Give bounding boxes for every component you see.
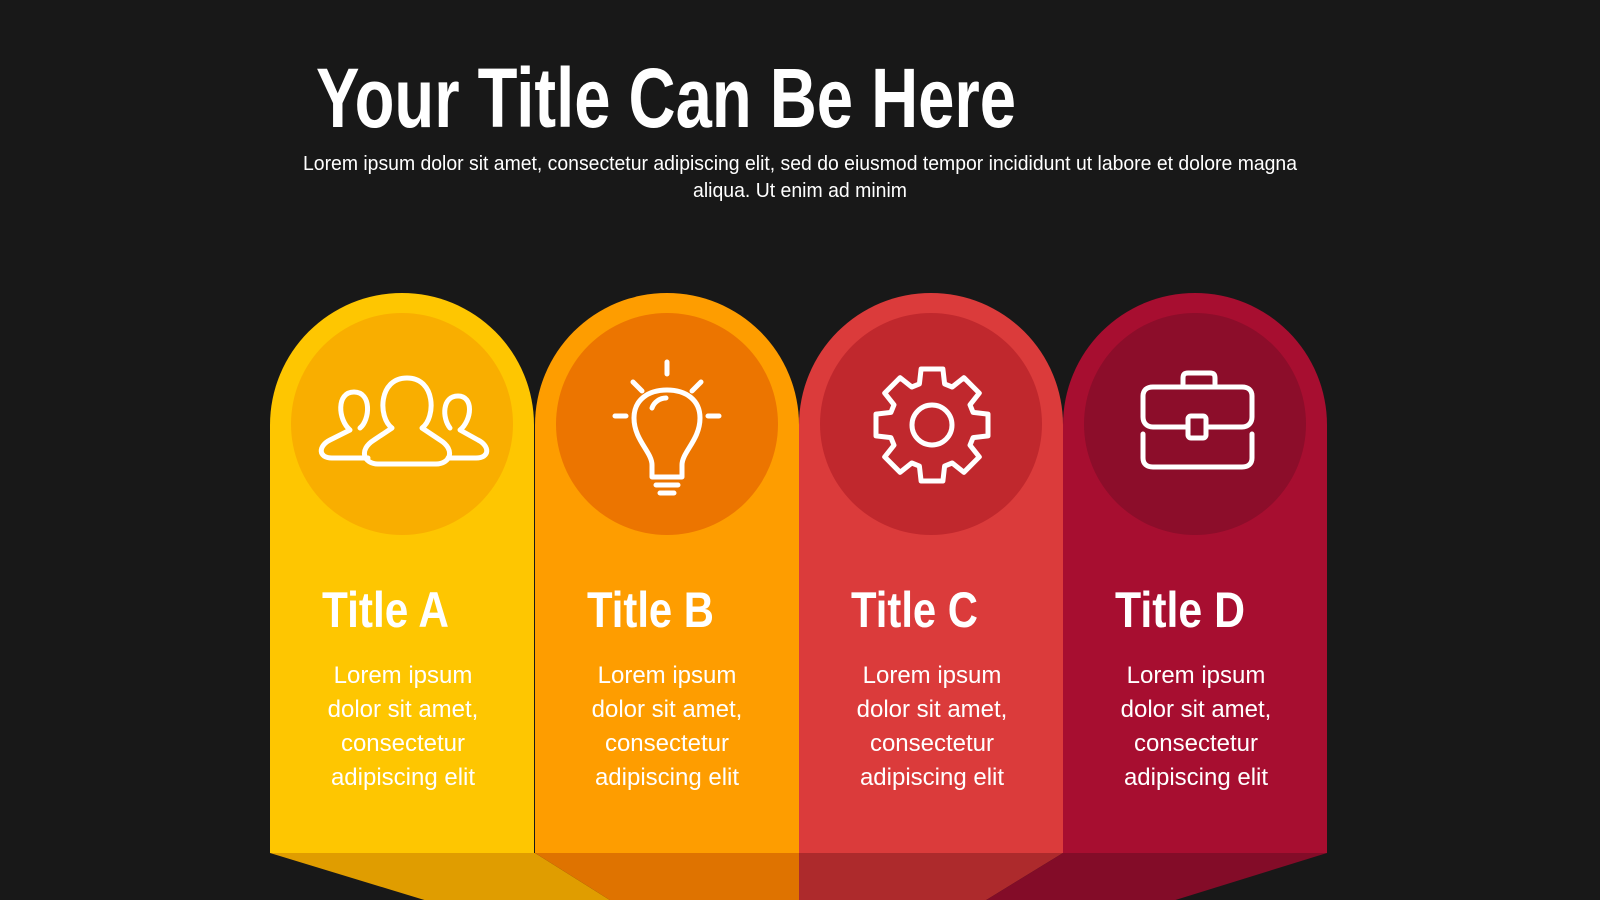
text B: adipiscing elit — [595, 764, 739, 791]
text D: Lorem ipsum — [1127, 662, 1265, 689]
text B — [592, 662, 742, 791]
text A: consectetur — [341, 730, 465, 757]
subtitle: Lorem ipsum dolor sit amet, consectetur adipiscing elit, sed do eiusmod tempor incididunt ut labore et dolore magna — [303, 153, 1298, 175]
icon: briefcase — [1143, 373, 1252, 467]
text B: dolor sit amet, — [592, 696, 742, 723]
text A: dolor sit amet, — [328, 696, 478, 723]
icon: people — [321, 378, 487, 464]
subtitle — [303, 153, 1298, 202]
panel: B — [535, 293, 799, 853]
text A: adipiscing elit — [331, 764, 475, 791]
text B: Lorem ipsum — [598, 662, 736, 689]
title D: Title D — [1115, 582, 1245, 638]
title B: Title B — [587, 582, 714, 638]
text C: Lorem ipsum — [863, 662, 1001, 689]
subtitle: aliqua. Ut enim ad minim — [693, 180, 907, 202]
text D: adipiscing elit — [1124, 764, 1268, 791]
icon: gear — [876, 369, 988, 481]
text C: dolor sit amet, — [857, 696, 1007, 723]
text B: consectetur — [605, 730, 729, 757]
text C — [857, 662, 1007, 791]
panel: A — [270, 293, 534, 853]
text A: Lorem ipsum — [334, 662, 472, 689]
text C: adipiscing elit — [860, 764, 1004, 791]
title: Your Title Can Be Here — [316, 51, 1016, 145]
panel: C — [799, 293, 1063, 853]
text C: consectetur — [870, 730, 994, 757]
title C: Title C — [851, 582, 978, 638]
panel: D — [1063, 293, 1327, 853]
title A: Title A — [322, 582, 449, 638]
text D: dolor sit amet, — [1121, 696, 1271, 723]
icon: light bulb — [615, 362, 719, 493]
text A — [328, 662, 478, 791]
text D — [1121, 662, 1271, 791]
text D: consectetur — [1134, 730, 1258, 757]
base trapezoid — [270, 853, 1327, 900]
